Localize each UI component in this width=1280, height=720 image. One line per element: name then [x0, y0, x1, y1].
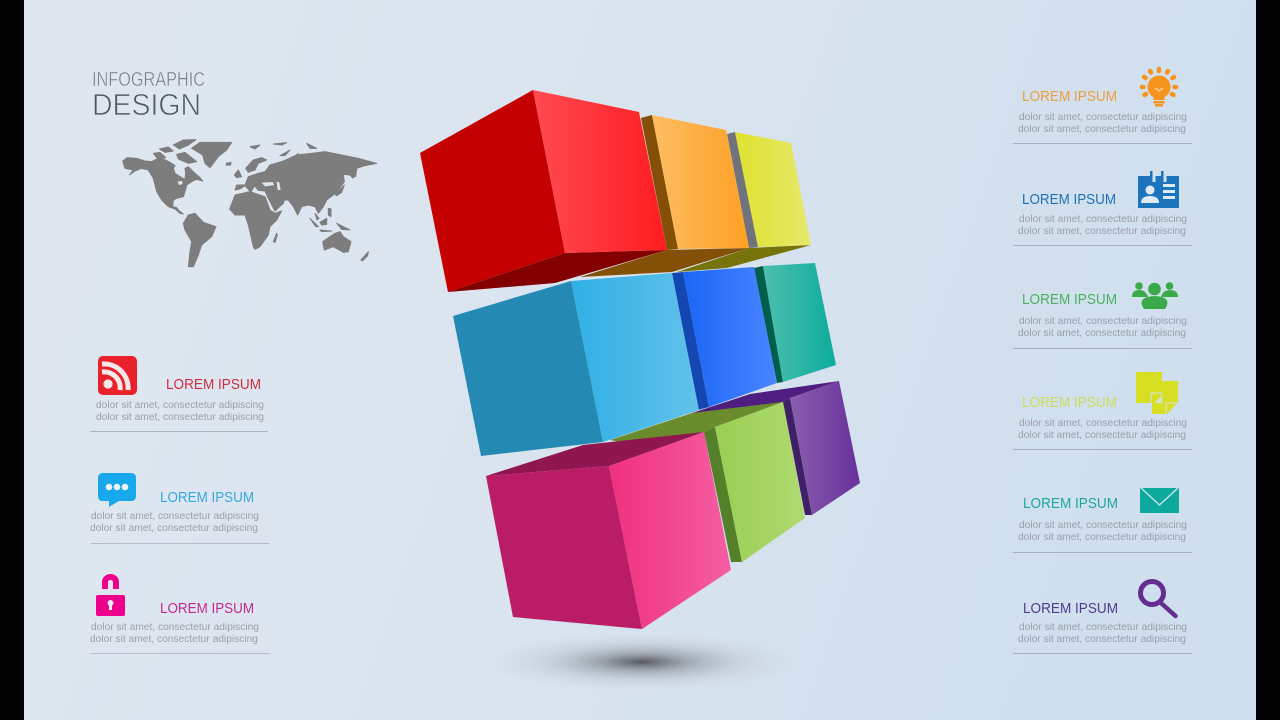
row 1: yellow cube	[677, 132, 811, 272]
left item: red rss: LOREM IPSUM	[166, 376, 261, 393]
row 2: sky cube	[453, 273, 699, 456]
right item: green team: dolor sit amet, consectetur adipiscing	[1018, 327, 1186, 339]
title: DESIGN	[92, 87, 201, 122]
right item: yellow documents: dolor sit amet, consectetur adipiscing	[1018, 429, 1186, 441]
right item: blue badge	[1013, 171, 1192, 246]
icon: id badge	[1138, 171, 1179, 208]
world map	[123, 140, 377, 267]
icon: padlock	[96, 577, 125, 616]
right item: orange bulb: dolor sit amet, consectetur adipiscing	[1018, 123, 1186, 135]
right item: orange bulb: dolor sit amet, consectetur adipiscing	[1019, 111, 1187, 123]
row 3: pink cube	[486, 432, 731, 629]
left item: red rss	[90, 356, 268, 432]
left item: pink lock: LOREM IPSUM	[160, 600, 254, 617]
right item: orange bulb	[1013, 69, 1192, 144]
icon: envelope	[1140, 488, 1179, 513]
left item: blue chat: LOREM IPSUM	[160, 489, 254, 506]
right item: teal mail	[1013, 488, 1192, 553]
icon: light bulb	[1142, 69, 1176, 106]
icon: magnifier	[1140, 582, 1176, 616]
icon: chat bubble	[98, 473, 136, 507]
right item: purple search: dolor sit amet, consectetur adipiscing	[1018, 633, 1186, 645]
right item: yellow documents: dolor sit amet, consectetur adipiscing	[1019, 417, 1187, 429]
right item: teal mail: dolor sit amet, consectetur adipiscing	[1018, 531, 1186, 543]
left item: blue chat: dolor sit amet, consectetur adipiscing	[90, 522, 258, 534]
row 2: teal cube	[754, 263, 836, 383]
ground shadow	[484, 632, 800, 692]
row 3: green cube	[610, 402, 805, 562]
right item: orange bulb: LOREM IPSUM	[1022, 88, 1117, 105]
left item: blue chat: dolor sit amet, consectetur adipiscing	[91, 510, 259, 522]
left item: red rss: dolor sit amet, consectetur adipiscing	[96, 399, 264, 411]
icon: rss	[98, 356, 137, 395]
right item: purple search	[1013, 582, 1192, 654]
row 2: blue cube	[672, 267, 777, 410]
right item: yellow documents: LOREM IPSUM	[1022, 394, 1117, 411]
right item: blue badge: dolor sit amet, consectetur adipiscing	[1019, 213, 1187, 225]
right item: green team: dolor sit amet, consectetur adipiscing	[1019, 315, 1187, 327]
right item: teal mail: dolor sit amet, consectetur adipiscing	[1019, 519, 1187, 531]
right item: blue badge: LOREM IPSUM	[1022, 191, 1116, 208]
right item: teal mail: LOREM IPSUM	[1023, 495, 1118, 512]
left item: pink lock	[90, 577, 269, 654]
title	[92, 68, 205, 122]
right item: yellow documents	[1013, 372, 1192, 450]
left item: red rss: dolor sit amet, consectetur adipiscing	[96, 411, 264, 423]
right item: purple search: LOREM IPSUM	[1023, 600, 1118, 617]
right item: blue badge: dolor sit amet, consectetur adipiscing	[1018, 225, 1186, 237]
left item: pink lock: dolor sit amet, consectetur adipiscing	[90, 633, 258, 645]
right item: green team	[1013, 282, 1192, 349]
row 3: purple cube	[692, 381, 860, 515]
row 1: orange cube	[580, 115, 749, 277]
cube stack	[420, 90, 860, 692]
right item: green team: LOREM IPSUM	[1022, 291, 1117, 308]
row 1: red cube	[420, 90, 667, 292]
icon: documents	[1136, 372, 1178, 414]
left item: pink lock: dolor sit amet, consectetur adipiscing	[91, 621, 259, 633]
icon: team	[1132, 282, 1178, 309]
right item: purple search: dolor sit amet, consectetur adipiscing	[1019, 621, 1187, 633]
left item: blue chat	[90, 473, 269, 544]
title: INFOGRAPHIC	[92, 68, 205, 91]
